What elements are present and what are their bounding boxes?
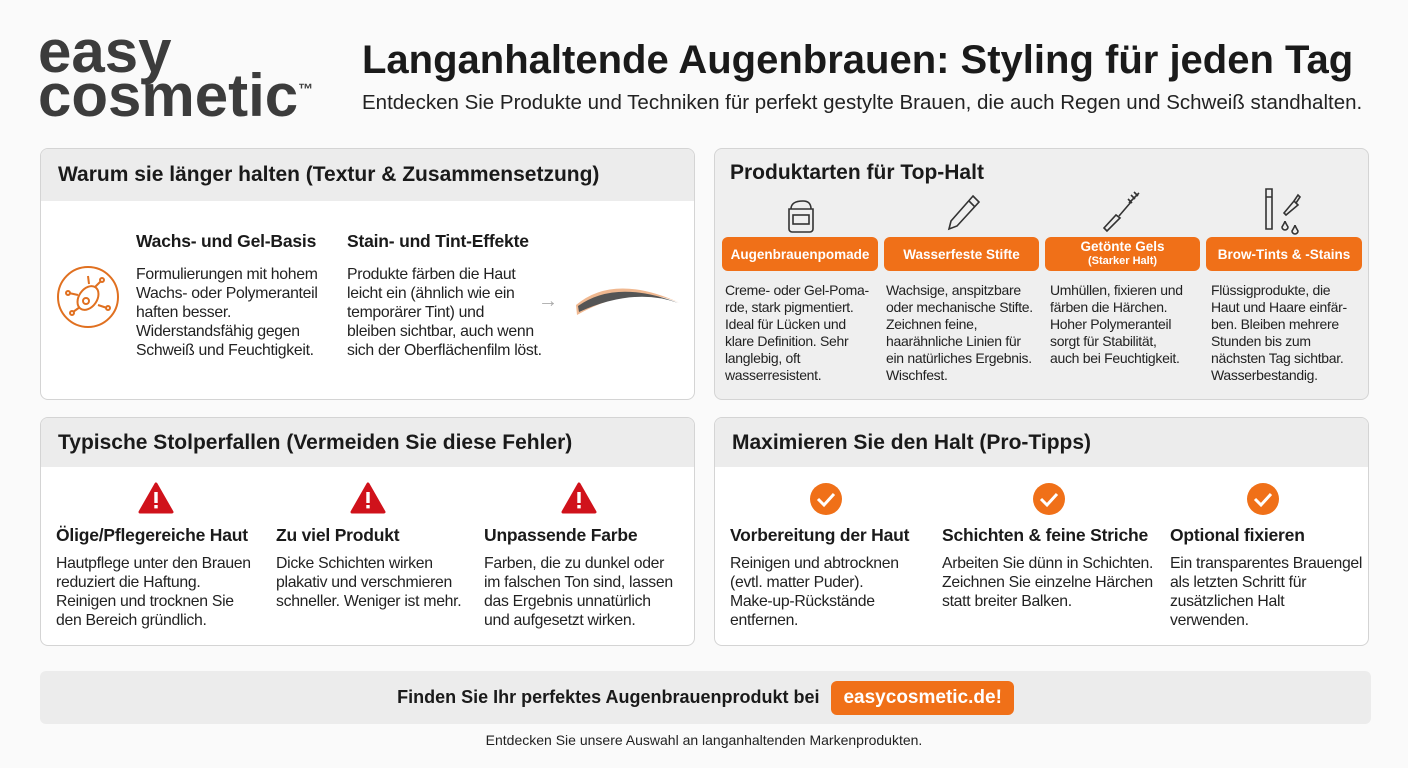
item: preparation: Reinigen und abtrocknen — [730, 555, 899, 572]
item: wrong colour: Unpassende Farbe — [484, 525, 637, 545]
text: pencils: haarähnliche Linien für — [886, 333, 1021, 349]
item: fix: verwenden. — [1170, 612, 1249, 629]
heading: Typische Stolperfallen (Vermeiden Sie diese Fehler) — [58, 431, 572, 454]
heading — [41, 149, 694, 201]
icon: eyebrow — [576, 288, 678, 315]
text: tints: Wasserbestandig. — [1211, 367, 1318, 383]
icon: warning — [138, 482, 174, 514]
column: stain tint — [347, 231, 542, 359]
text: gels: sorgt für Stabilität, — [1050, 333, 1157, 349]
item: fix: Optional fixieren — [1170, 525, 1305, 545]
item: fix — [1170, 483, 1362, 629]
text: tints: ben. Bleiben mehrere — [1211, 316, 1339, 332]
item: preparation: Make-up-Rückstände — [730, 593, 875, 610]
logo: easy — [38, 18, 171, 85]
title: Langanhaltende Augenbrauen: Styling für jeden Tag — [362, 38, 1353, 82]
heading — [715, 418, 1368, 467]
column: wax gel: Wachs- oder Polymeranteil — [136, 285, 318, 302]
label: waterproof pencils — [884, 237, 1039, 271]
text: pencils: ein natürliches Ergebnis. — [886, 350, 1032, 366]
item: wrong colour: und aufgesetzt wirken. — [484, 612, 635, 629]
text: gels: Hoher Polymeranteil — [1050, 316, 1171, 332]
text: pencils — [886, 282, 1033, 383]
column: wax gel: Schweiß und Feuchtigkeit. — [136, 342, 314, 359]
item: layers: Arbeiten Sie dünn in Schichten. — [942, 555, 1153, 572]
column: wax gel: Formulierungen mit hohem — [136, 266, 318, 283]
panel: product types — [714, 148, 1369, 400]
label: waterproof pencils: Wasserfeste Stifte — [903, 246, 1020, 262]
item: preparation: entfernen. — [730, 612, 798, 629]
label: brow tints — [1206, 237, 1362, 271]
item: wrong colour: im falschen Ton sind, lassen — [484, 574, 673, 591]
icon: check — [1033, 483, 1065, 515]
item: preparation — [730, 483, 910, 629]
text: tints: Flüssigprodukte, die — [1211, 282, 1330, 298]
panel: why longer lasting — [40, 148, 695, 400]
icon: pencil — [948, 194, 980, 230]
item: too much product: Dicke Schichten wirken — [276, 555, 433, 572]
text: gels — [1050, 282, 1183, 366]
column: wax gel: Wachs- und Gel-Basis — [136, 231, 316, 251]
label: pomade — [722, 237, 878, 271]
icon: formula — [57, 266, 119, 328]
icon: warning — [350, 482, 386, 514]
footer note: Entdecken Sie unsere Auswahl an langanhaltenden Markenprodukten. — [486, 732, 922, 748]
item: too much product: schneller. Weniger ist mehr. — [276, 593, 461, 610]
column: stain tint: Produkte färben die Haut — [347, 266, 515, 283]
text: pencils: Wachsige, anspitzbare — [886, 282, 1021, 298]
text: pomade — [725, 282, 869, 383]
panel: pitfalls — [40, 417, 695, 646]
label: tinted gels — [1045, 237, 1200, 271]
column: stain tint: temporärer Tint) und — [347, 304, 484, 321]
column: wax gel: Widerstandsfähig gegen — [136, 323, 300, 340]
item: fix: zusätzlichen Halt — [1170, 593, 1284, 610]
icon: mascara brush — [1103, 191, 1140, 232]
heading: Produktarten für Top-Halt — [730, 161, 984, 184]
text: pencils: oder mechanische Stifte. — [886, 299, 1033, 315]
column: stain tint: Stain- und Tint-Effekte — [347, 231, 529, 251]
text: gels: färben die Härchen. — [1050, 299, 1167, 315]
text: pencils: Zeichnen feine, — [886, 316, 977, 332]
item: layers — [942, 483, 1153, 610]
text: tints — [1211, 282, 1347, 383]
logo — [38, 18, 313, 129]
icon: check — [810, 483, 842, 515]
label: pomade: Augenbrauenpomade — [731, 246, 869, 262]
subtitle: Entdecken Sie Produkte und Techniken für perfekt gestylte Brauen, die auch Regen und Schweiß standhalten. — [362, 91, 1362, 114]
footer banner: Finden Sie Ihr perfektes Augenbrauenprodukt bei — [397, 687, 819, 707]
text: pencils: Wischfest. — [886, 367, 948, 383]
heading: Maximieren Sie den Halt (Pro-Tipps) — [732, 431, 1091, 454]
column: stain tint: bleiben sichtbar, auch wenn — [347, 323, 534, 340]
text: tints: nächsten Tag sichtbar. — [1211, 350, 1343, 366]
label: brow tints: Brow-Tints & -Stains — [1218, 246, 1350, 262]
arrow: → — [538, 290, 558, 312]
item: oily skin: Hautpflege unter den Brauen — [56, 555, 251, 572]
item: too much product: Zu viel Produkt — [276, 525, 399, 545]
item: layers: Zeichnen Sie einzelne Härchen — [942, 574, 1153, 591]
text: gels: auch bei Feuchtigkeit. — [1050, 350, 1180, 366]
item: oily skin: Reinigen und trocknen Sie — [56, 593, 234, 610]
item: oily skin: reduziert die Haftung. — [56, 574, 200, 591]
text: pomade: rde, stark pigmentiert. — [725, 299, 854, 315]
icon: jar — [788, 200, 814, 233]
text: pomade: klare Definition. Sehr — [725, 333, 848, 349]
item: layers: Schichten & feine Striche — [942, 525, 1148, 545]
item: oily skin — [56, 482, 251, 629]
column: stain tint: sich der Oberflächenfilm löst. — [347, 342, 542, 359]
column: stain tint: leicht ein (ähnlich wie ein — [347, 285, 515, 302]
heading: Warum sie länger halten (Textur & Zusammensetzung) — [58, 163, 599, 186]
footer banner — [40, 671, 1371, 724]
text: pomade: Creme- oder Gel-Poma- — [725, 282, 869, 298]
icon: dropper — [1265, 188, 1301, 235]
column: wax gel — [136, 231, 318, 359]
button: shop link — [831, 680, 1014, 714]
item: fix: als letzten Schritt für — [1170, 574, 1306, 591]
item: oily skin: den Bereich gründlich. — [56, 612, 207, 629]
button: shop link: easycosmetic.de! — [843, 686, 1002, 708]
item: too much product — [276, 482, 461, 610]
label: tinted gels: (Starker Halt) — [1088, 255, 1157, 267]
item: layers: statt breiter Balken. — [942, 593, 1072, 610]
item: oily skin: Ölige/Pflegereiche Haut — [56, 525, 248, 545]
item: wrong colour: das Ergebnis unnatürlich — [484, 593, 651, 610]
item: wrong colour — [484, 482, 673, 629]
text: tints: Stunden bis zum — [1211, 333, 1311, 349]
text: pomade: wasserresistent. — [725, 367, 821, 383]
heading — [41, 418, 694, 467]
text: pomade: langlebig, oft — [725, 350, 800, 366]
item: preparation: (evtl. matter Puder). — [730, 574, 863, 591]
label: tinted gels: Getönte Gels — [1080, 239, 1165, 254]
text: tints: Haut und Haare einfär- — [1211, 299, 1347, 315]
panel: pro tips — [714, 417, 1369, 646]
item: wrong colour: Farben, die zu dunkel oder — [484, 555, 664, 572]
item: preparation: Vorbereitung der Haut — [730, 525, 909, 545]
icon: warning — [562, 482, 597, 514]
item: fix: Ein transparentes Brauengel — [1170, 555, 1362, 572]
column: wax gel: haften besser. — [136, 304, 231, 321]
text: pomade: Ideal für Lücken und — [725, 316, 846, 332]
icon: check — [1247, 483, 1279, 515]
logo: cosmetic™ — [38, 62, 313, 129]
item: too much product: plakativ und verschmieren — [276, 574, 452, 591]
text: gels: Umhüllen, fixieren und — [1050, 282, 1183, 298]
